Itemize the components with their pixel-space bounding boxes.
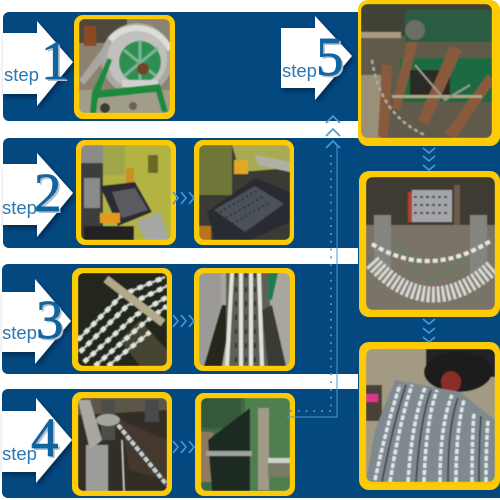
photo: step 4 post on green [195, 393, 295, 496]
photo: step 2 punched sheet [194, 140, 294, 245]
photo: step 4 strip feed [72, 392, 172, 496]
panel: step 4 band [2, 389, 500, 498]
arrow: step 1 [3, 21, 73, 106]
panel: step 1 band [3, 12, 383, 121]
photo: step 3 strips in rollers [194, 268, 295, 371]
panel: step 3 band [2, 264, 500, 374]
arrow: step 3 [2, 279, 71, 364]
arrow: downward chevrons above finished coil [423, 319, 435, 342]
number: 3: 3 [38, 291, 66, 352]
photo: finished razor coil [359, 342, 500, 490]
photo: step 2 press machine [76, 140, 176, 245]
arrow: step 4 [2, 398, 72, 483]
label: step 2: step [2, 197, 37, 218]
number: 5: 5 [318, 28, 346, 89]
arrow: downward chevrons under step 5 [423, 148, 435, 170]
number: 1: 1 [43, 32, 70, 93]
photo: step 1 steel coil [74, 15, 175, 119]
arrow: upward chevrons to step 5 [326, 116, 340, 148]
number: 4: 4 [31, 407, 58, 468]
label: step 5: step [282, 60, 317, 81]
photo: step 3 razor strips on bar [72, 268, 172, 371]
number: 2: 2 [34, 162, 62, 223]
label: step 1: step [4, 64, 39, 85]
arrow: step 5 [281, 16, 352, 100]
label: step 3: step [2, 322, 37, 343]
number: 3: 3 [36, 289, 64, 350]
number: 2: 2 [36, 164, 64, 225]
arrow: chevrons step 3 [173, 315, 194, 327]
number: 5: 5 [316, 26, 344, 87]
arrow: chevrons step 4 [173, 441, 194, 453]
arrow: chevrons step 2 [173, 192, 194, 204]
arrow: step 2 [2, 153, 73, 237]
connector: dotted and solid line from step 4 to step 5 [287, 146, 337, 417]
panel: step 2 band [3, 138, 500, 248]
photo: coil on round frame [359, 171, 500, 317]
panel: right column backing [358, 138, 500, 498]
number: 1: 1 [41, 30, 68, 91]
label: step 4: step [2, 443, 37, 464]
number: 4: 4 [33, 409, 60, 470]
photo: step 5 coiling frame [358, 0, 500, 146]
